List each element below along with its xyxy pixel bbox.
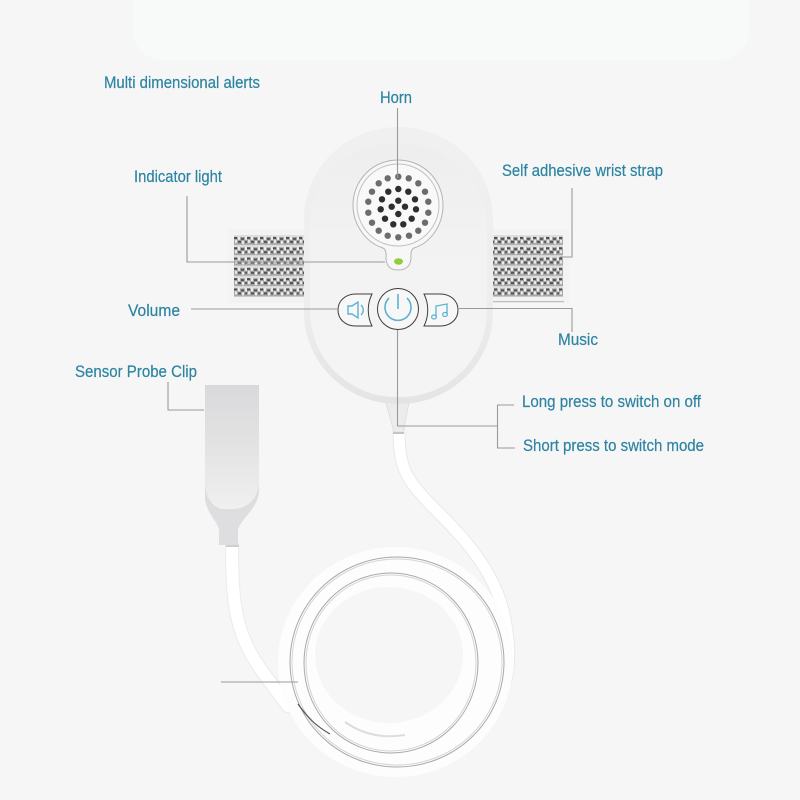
label: multi dimensional alerts: Multi dimensional alerts	[104, 74, 260, 92]
top blank panel	[133, 0, 749, 60]
label: sensor probe clip: Sensor Probe Clip	[75, 363, 197, 381]
leader lines	[168, 108, 572, 682]
label: horn: Horn	[380, 89, 412, 107]
sensor probe clip	[205, 385, 259, 547]
label: long press: Long press to switch on off	[522, 393, 701, 411]
device body	[304, 127, 493, 404]
speaker grille	[353, 160, 443, 270]
label: music: Music	[558, 331, 598, 349]
power button	[378, 288, 418, 330]
wrist strap: right	[490, 229, 569, 303]
volume button	[338, 294, 372, 326]
label: self adhesive wrist strap: Self adhesive wrist strap	[502, 162, 663, 180]
cable strain relief	[386, 403, 409, 434]
wrist strap: left	[228, 229, 308, 303]
music button	[424, 294, 458, 326]
label: indicator light: Indicator light	[134, 168, 222, 186]
coiled cable	[232, 432, 513, 777]
indicator LED	[394, 258, 403, 265]
label: volume: Volume	[128, 302, 180, 320]
label: short press: Short press to switch mode	[523, 437, 704, 455]
